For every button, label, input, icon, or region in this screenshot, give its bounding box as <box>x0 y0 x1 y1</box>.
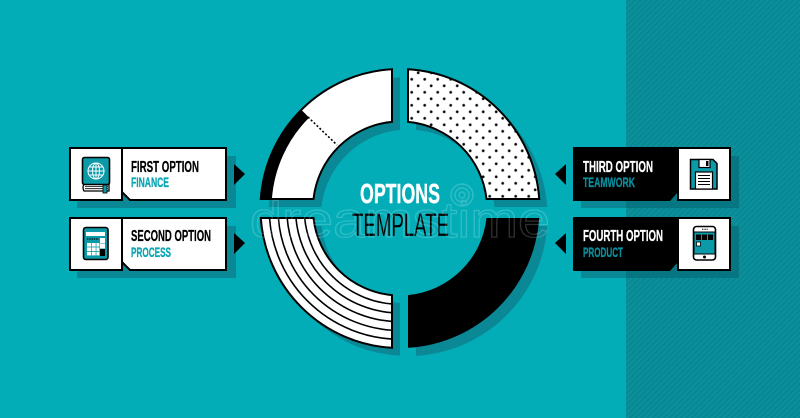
segment: bottom right, solid black <box>408 218 539 348</box>
donut shadows <box>269 77 547 356</box>
segment: bottom left, concentric stripes <box>260 217 393 349</box>
panel: fourth option <box>573 217 730 271</box>
striped right band <box>626 0 800 418</box>
panel: second option <box>70 218 226 270</box>
text: process: PROCESS <box>131 244 171 260</box>
arrow: fourth option <box>555 233 566 254</box>
panel: third option <box>573 147 730 201</box>
icon: book with globe <box>82 158 110 193</box>
icon: floppy disk <box>690 160 717 189</box>
text: product: PRODUCT <box>583 244 623 260</box>
text: finance: FINANCE <box>131 174 169 190</box>
arrow: third option <box>555 164 566 185</box>
text: third option: THIRD OPTION <box>583 159 653 176</box>
icon: calculator <box>84 228 108 260</box>
panel shadows <box>77 156 739 278</box>
text: teamwork: TEAMWORK <box>583 174 635 190</box>
subtitle: template: TEMPLATE <box>352 207 449 243</box>
segment: top left, white with black edge band <box>261 69 392 199</box>
panel: first option <box>70 148 226 200</box>
text: second option: SECOND OPTION <box>131 228 211 245</box>
segment: top right, dotted <box>408 69 539 199</box>
text: fourth option: FOURTH OPTION <box>583 228 663 245</box>
arrow: first option <box>234 164 245 185</box>
watermark: dreamstime <box>250 192 550 248</box>
title: options: OPTIONS <box>360 178 440 209</box>
center title <box>352 178 449 243</box>
text: first option: FIRST OPTION <box>131 159 199 176</box>
icon: tablet <box>694 226 716 260</box>
arrow: second option <box>234 233 245 254</box>
